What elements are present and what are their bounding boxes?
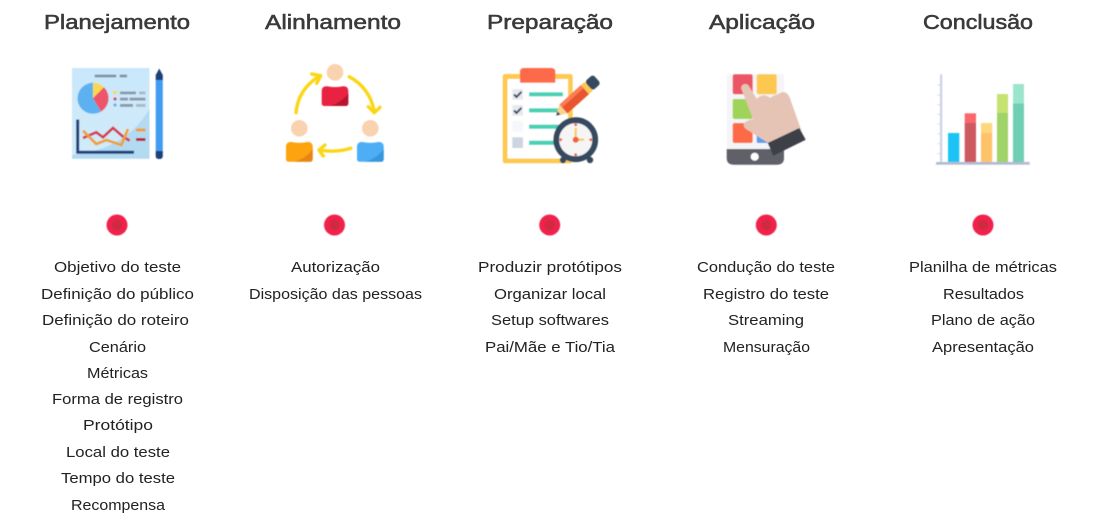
marker dot [539, 214, 560, 236]
panel: Preparação [478, 12, 622, 356]
list: Planejamento items: Protótipo [83, 418, 153, 434]
list: Conclusão items: Plano de ação [931, 313, 1035, 329]
heading: Preparação: Preparação [487, 12, 613, 34]
list: Planejamento items: Definição do roteiro [42, 313, 189, 329]
heading: Planejamento: Planejamento [44, 12, 190, 34]
icon: report with charts and pen [72, 68, 163, 159]
marker dot [972, 214, 994, 236]
marker dot [324, 214, 345, 236]
list: Aplicação items: Streaming [728, 313, 804, 329]
panel: Aplicação [697, 12, 835, 356]
heading: Alinhamento: Alinhamento [265, 12, 401, 34]
list: Aplicação items: Registro do teste [703, 287, 829, 303]
list: Planejamento items [41, 260, 194, 514]
list: Planejamento items: Tempo do teste [61, 471, 175, 487]
list: Conclusão items [909, 260, 1057, 356]
icon: three people in a cycle [286, 64, 384, 162]
list: Preparação items: Pai/Mãe e Tio/Tia [485, 340, 616, 356]
list: Planejamento items: Métricas [87, 366, 148, 382]
list: Conclusão items: Apresentação [932, 340, 1034, 356]
list: Preparação items: Produzir protótipos [478, 260, 622, 276]
heading: Conclusão: Conclusão [923, 12, 1033, 34]
list: Planejamento items: Objetivo do teste [54, 260, 181, 276]
icon: clipboard, pencil and clock [503, 68, 601, 163]
list: Planejamento items: Local do teste [66, 445, 170, 461]
list: Planejamento items: Recompensa [71, 498, 166, 514]
icon: bar chart [936, 74, 1030, 165]
list: Alinhamento items: Autorização [291, 260, 380, 276]
list: Planejamento items: Cenário [89, 340, 146, 356]
panel: Planejamento [41, 12, 194, 514]
list: Preparação items: Setup softwares [491, 313, 609, 329]
panel: Conclusão [909, 12, 1057, 356]
list: Conclusão items: Resultados [943, 287, 1024, 303]
marker dot [756, 214, 777, 236]
list: Conclusão items: Planilha de métricas [909, 260, 1057, 276]
list: Aplicação items: Mensuração [723, 340, 810, 356]
marker dot [106, 214, 128, 236]
list: Alinhamento items [249, 260, 422, 303]
heading: Aplicação: Aplicação [709, 12, 815, 34]
list: Planejamento items: Forma de registro [52, 392, 183, 408]
list: Alinhamento items: Disposição das pessoas [249, 287, 422, 303]
panel: Alinhamento [249, 12, 422, 303]
list: Preparação items [478, 260, 622, 356]
list: Preparação items: Organizar local [494, 287, 606, 303]
icon: hand tapping smartphone [727, 74, 806, 165]
list: Aplicação items: Condução do teste [697, 260, 835, 276]
list: Planejamento items: Definição do público [41, 287, 194, 303]
list: Aplicação items [697, 260, 835, 356]
